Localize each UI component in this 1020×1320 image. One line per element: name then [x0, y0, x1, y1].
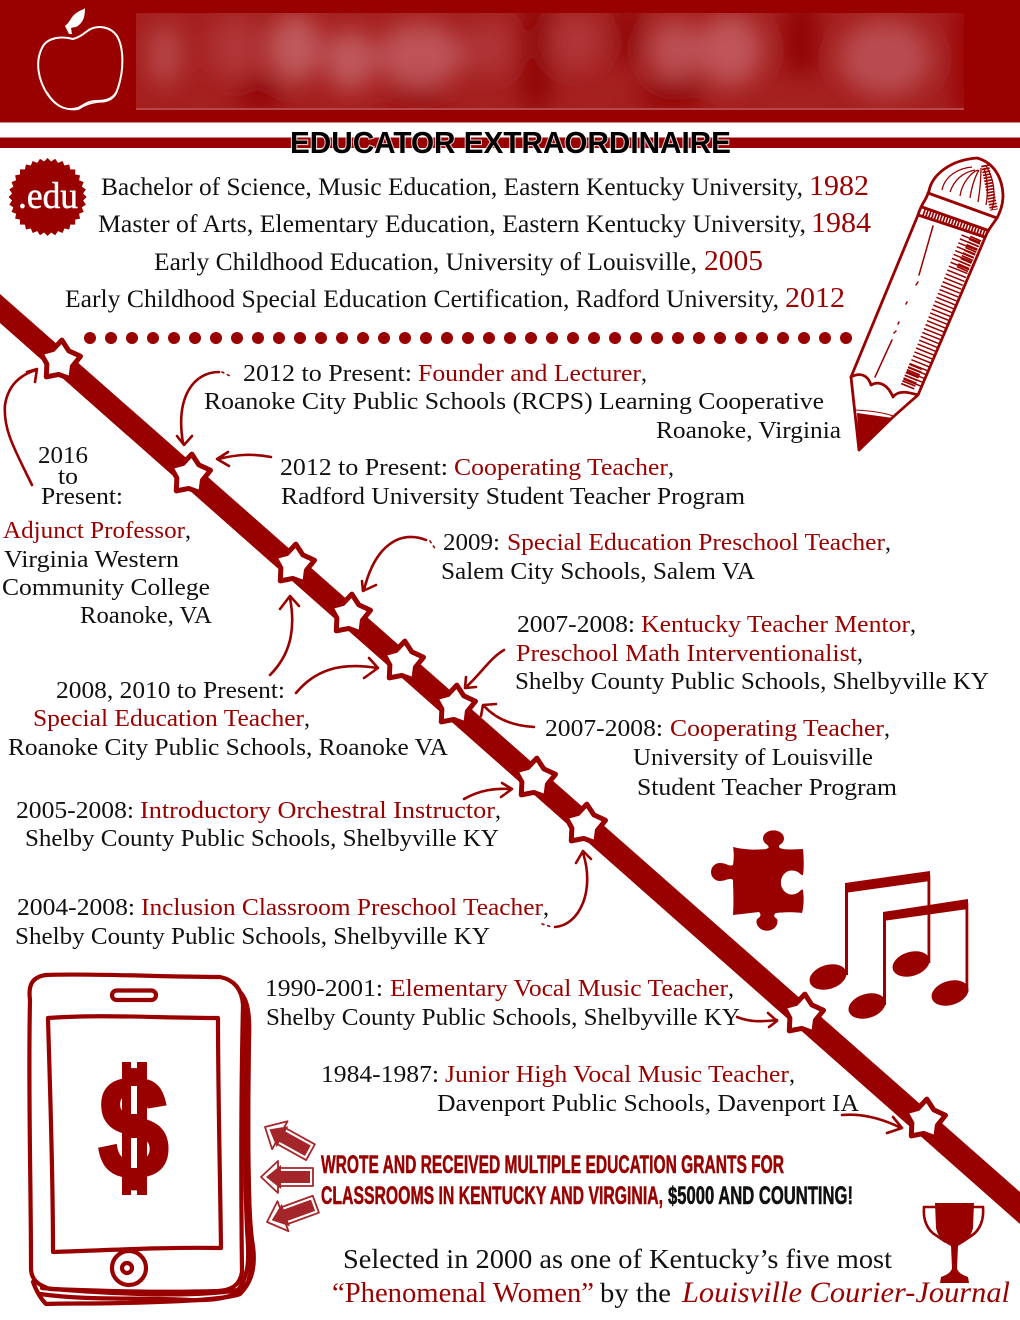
arrow: grant arrow upper [257, 1113, 318, 1166]
entry: orchestral instructor: 2005-2008: [16, 798, 134, 824]
entry: elementary vocal music teacher: Elementary Vocal Music Teacher [390, 976, 728, 1002]
arrow: 1990 to star [737, 1013, 777, 1027]
entry: special education preschool teacher: Salem City Schools, Salem VA [441, 559, 756, 585]
entry: special education preschool teacher [441, 530, 891, 585]
arrow: special education to star [296, 658, 378, 693]
entry: adjunct professor: Roanoke, VA [80, 603, 213, 629]
entry: junior high vocal music teacher [321, 1062, 860, 1117]
entry: founder and lecturer: Roanoke City Public Schools (RCPS) Learning Cooperative [204, 389, 824, 415]
arrow: mentor to star [465, 650, 504, 688]
entry: adjunct professor: to [58, 464, 78, 490]
entry: inclusion classroom teacher: , [543, 895, 549, 921]
icon: pencil [851, 158, 1003, 450]
entry: elementary vocal music teacher: , [728, 976, 734, 1002]
entry: kentucky teacher mentor: 2007-2008: [517, 612, 635, 638]
entry: special education teacher: 2008, 2010 to Present: [56, 678, 285, 704]
arrow: 2016 to star [5, 369, 37, 485]
entry: special education teacher: , [304, 706, 310, 732]
entry: kentucky teacher mentor: Kentucky Teacher Mentor [641, 612, 910, 638]
timeline star 2008 [382, 639, 425, 681]
icon: .edu badge: .edu [18, 176, 78, 217]
entry: kentucky teacher mentor: , [910, 612, 916, 638]
entry: junior high vocal music teacher: 1984-1987: [321, 1062, 439, 1088]
timeline star 2012 [169, 452, 212, 494]
entry: orchestral instructor: , [495, 798, 501, 824]
degree: special education: Early Childhood Special Education Certification, Radford University, [65, 284, 779, 313]
entry: cooperating teacher radford: 2012 to Present: [280, 455, 448, 481]
arrow: founder to star [177, 372, 232, 445]
entry: founder and lecturer: Founder and Lecturer [418, 361, 641, 387]
degree: special education: 2012 [785, 282, 845, 314]
entry: cooperating teacher radford: Radford University Student Teacher Program [281, 484, 745, 510]
icon: tablet with dollar sign [29, 974, 254, 1304]
timeline star 2005 [514, 756, 557, 798]
entry: orchestral instructor: Introductory Orchestral Instructor [140, 798, 495, 824]
icon: trophy [924, 1203, 983, 1283]
entry: adjunct professor: 2016 [38, 443, 88, 469]
entry: special education preschool teacher: , [885, 530, 891, 556]
degree: bachelor: Bachelor of Science, Music Education, Eastern Kentucky University, [101, 172, 803, 201]
icon: tablet with dollar sign: $ [98, 1046, 169, 1209]
entry: orchestral instructor [16, 798, 501, 852]
entry: cooperating teacher radford [280, 455, 745, 510]
title: EDUCATOR EXTRAORDINAIRE [290, 126, 731, 160]
award statement: Selected in 2000 as one of Kentucky’s five most [343, 1244, 893, 1274]
arrow: 2009 to star [362, 537, 436, 591]
entry: cooperating teacher louisville: University of Louisville [633, 745, 873, 771]
award statement: “Phenomenal Women” [332, 1278, 594, 1309]
arrow: 1984 to star [842, 1115, 902, 1133]
arrow: grant arrow middle [261, 1161, 313, 1193]
timeline star 2016 [39, 338, 82, 380]
entry: adjunct professor: Virginia Western [4, 547, 179, 573]
timeline star 2010 [273, 542, 316, 584]
entry: inclusion classroom teacher [15, 895, 549, 950]
entry: cooperating teacher louisville: 2007-2008: [545, 716, 663, 742]
entry: kentucky teacher mentor [515, 612, 989, 695]
entry: junior high vocal music teacher: Junior High Vocal Music Teacher [445, 1062, 789, 1088]
arrow: special education to upper star [270, 596, 299, 675]
grants statement [321, 1151, 853, 1210]
entry: adjunct professor: Present: [41, 484, 123, 510]
grants statement: CLASSROOMS IN KENTUCKY AND VIRGINIA, [321, 1182, 663, 1210]
degree: bachelor: 1982 [809, 170, 869, 202]
entry: special education preschool teacher: Special Education Preschool Teacher [507, 530, 885, 556]
entry: orchestral instructor: Shelby County Public Schools, Shelbyville KY [25, 826, 499, 852]
entry: kentucky teacher mentor: , [857, 641, 863, 667]
dotted divider [90, 332, 848, 344]
entry: cooperating teacher louisville: Cooperating Teacher [670, 716, 884, 742]
icon: puzzle piece [711, 830, 804, 931]
entry: founder and lecturer: , [641, 361, 647, 387]
title rule [0, 138, 1020, 148]
timeline star 1984 [904, 1097, 947, 1139]
arrow: grant arrow lower [262, 1189, 321, 1237]
entry: adjunct professor: Community College [2, 575, 210, 601]
timeline ribbon [0, 294, 1020, 1224]
entry: cooperating teacher radford: Cooperating Teacher [454, 455, 668, 481]
timeline star 2004 [564, 802, 607, 844]
entry: kentucky teacher mentor: Preschool Math Interventionalist [516, 641, 857, 667]
entry: junior high vocal music teacher: Davenport Public Schools, Davenport IA [437, 1091, 860, 1117]
icon: apple [38, 8, 122, 110]
degree: early childhood: 2005 [704, 245, 763, 277]
entry: cooperating teacher louisville: , [884, 716, 890, 742]
degree: early childhood: Early Childhood Education, University of Louisville, [154, 247, 697, 276]
icon: music notes [806, 871, 972, 1023]
entry: special education teacher: Special Education Teacher [33, 706, 304, 732]
blurred name block [136, 13, 964, 110]
education list [65, 170, 872, 314]
arrow: 2007 cooperating to star [481, 704, 534, 727]
entry: cooperating teacher radford: , [668, 455, 674, 481]
award statement: by the [600, 1278, 671, 1308]
entry: inclusion classroom teacher: Inclusion Classroom Preschool Teacher [141, 895, 543, 921]
entry: founder and lecturer: 2012 to Present: [243, 361, 412, 387]
arrow: cooperating teacher to star [217, 452, 271, 466]
award statement [332, 1244, 1010, 1309]
entry: elementary vocal music teacher: 1990-2001: [265, 976, 383, 1002]
entry: kentucky teacher mentor: Shelby County Public Schools, Shelbyville KY [515, 669, 989, 695]
timeline star 2007 [434, 683, 477, 725]
entry: special education teacher [8, 678, 449, 761]
degree: master: Master of Arts, Elementary Education, Eastern Kentucky University, [98, 209, 806, 238]
entry: special education teacher: Roanoke City Public Schools, Roanoke VA [8, 735, 449, 761]
arrow: 2004 to star [542, 851, 591, 927]
grants statement: $5000 AND COUNTING! [668, 1182, 853, 1210]
degree: master: 1984 [811, 207, 872, 239]
entry: inclusion classroom teacher: Shelby County Public Schools, Shelbyville KY [15, 924, 490, 950]
entry: junior high vocal music teacher: , [789, 1062, 795, 1088]
entry: elementary vocal music teacher: Shelby County Public Schools, Shelbyville KY [266, 1005, 740, 1031]
entry: founder and lecturer: Roanoke, Virginia [656, 418, 841, 444]
entry: special education preschool teacher: 2009: [443, 530, 500, 556]
icon: .edu badge [9, 158, 87, 236]
arrow: 2005 to star [464, 783, 512, 799]
award statement: Louisville Courier-Journal [681, 1276, 1010, 1309]
timeline star 2009 [329, 592, 372, 634]
header banner [0, 0, 1020, 122]
entry: cooperating teacher louisville [545, 716, 897, 801]
entry: cooperating teacher louisville: Student Teacher Program [637, 775, 897, 801]
entry: adjunct professor: Adjunct Professor [3, 518, 185, 544]
timeline star 1990 [782, 992, 825, 1034]
entry: founder and lecturer [204, 361, 841, 444]
entry: adjunct professor: , [185, 518, 191, 544]
entry: adjunct professor [2, 443, 213, 629]
entry: elementary vocal music teacher [265, 976, 740, 1031]
entry: inclusion classroom teacher: 2004-2008: [17, 895, 135, 921]
